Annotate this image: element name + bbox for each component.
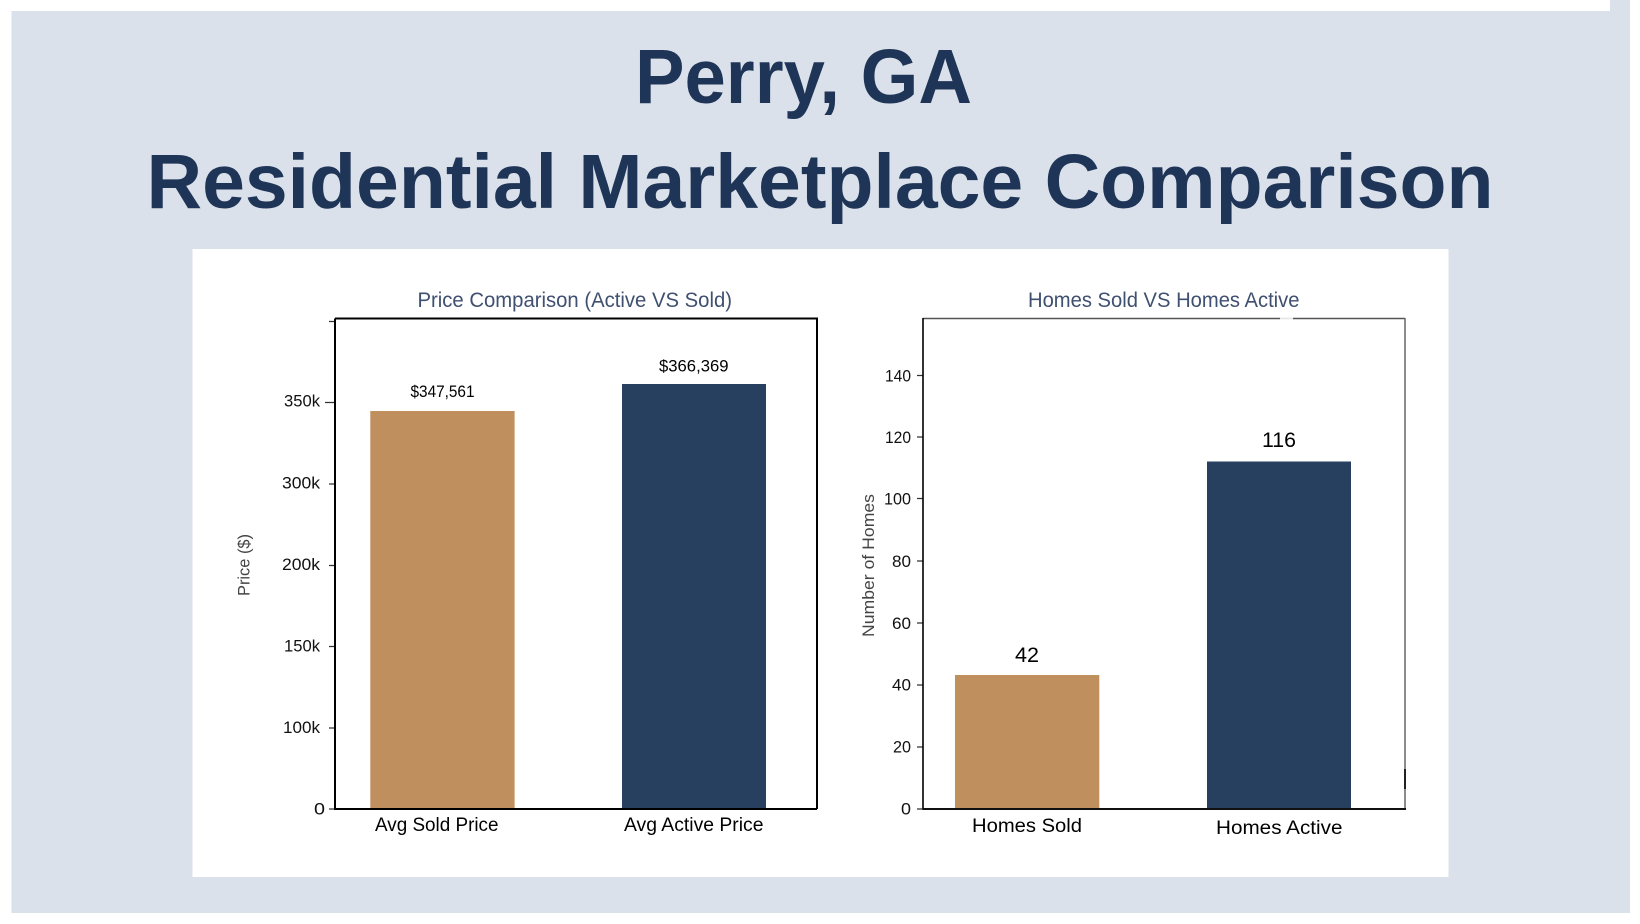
y axis tick labels: price: 100k (283, 719, 321, 737)
y axis tick labels: price: 150k (284, 638, 321, 656)
category label: homes active: Homes Active (1216, 817, 1342, 839)
chart: homes sold vs active (860, 289, 1406, 839)
chart title: price comparison: Price Comparison (Active VS Sold) (418, 289, 732, 312)
bar: avg sold price (370, 411, 515, 809)
y axis tick labels: homes: 140 (885, 368, 911, 386)
y axis tick labels: homes: 0 (901, 800, 911, 818)
title: Perry, GA (635, 34, 972, 120)
y axis title: price: Price ($) (236, 534, 254, 596)
value label: homes active: 116 (1262, 429, 1296, 452)
bar: homes active (1207, 462, 1351, 809)
value label: homes sold: 42 (1015, 644, 1039, 667)
y axis tick labels: price: 0 (314, 800, 325, 818)
y axis tick labels: homes: 60 (892, 615, 911, 633)
y axis tick labels: price (282, 392, 325, 818)
y axis tick labels: homes (884, 368, 911, 818)
y axis tick labels: homes: 80 (892, 553, 911, 571)
category label: avg sold price: Avg Sold Price (375, 814, 498, 836)
chart title: homes: Homes Sold VS Homes Active (1028, 289, 1300, 312)
y axis tick labels: homes: 20 (893, 738, 911, 756)
category label: avg active price: Avg Active Price (624, 814, 764, 836)
y axis tick labels: homes: 120 (885, 429, 911, 447)
y axis tick labels: price: 350k (284, 392, 321, 410)
y axis tick labels: homes: 40 (892, 676, 911, 694)
chart: price comparison (236, 289, 817, 836)
title: Residential Marketplace Comparison (146, 139, 1494, 225)
y axis tick labels: homes: 100 (884, 490, 911, 508)
value label: avg active price: $366,369 (659, 358, 728, 376)
y axis tick marks: homes (917, 376, 923, 809)
bar: homes sold (955, 675, 1099, 809)
y axis tick marks: price (325, 322, 335, 809)
value label: avg sold price: $347,561 (410, 383, 474, 401)
plot frame: homes (923, 318, 1406, 809)
y axis tick labels: price: 200k (282, 556, 321, 574)
plot frame: price (335, 318, 817, 809)
title (146, 34, 1494, 225)
panel: charts (192, 249, 1448, 877)
y axis title: homes: Number of Homes (860, 494, 878, 637)
category label: homes sold: Homes Sold (972, 815, 1082, 837)
y axis tick labels: price: 300k (282, 474, 321, 492)
bar: avg active price (622, 384, 766, 809)
